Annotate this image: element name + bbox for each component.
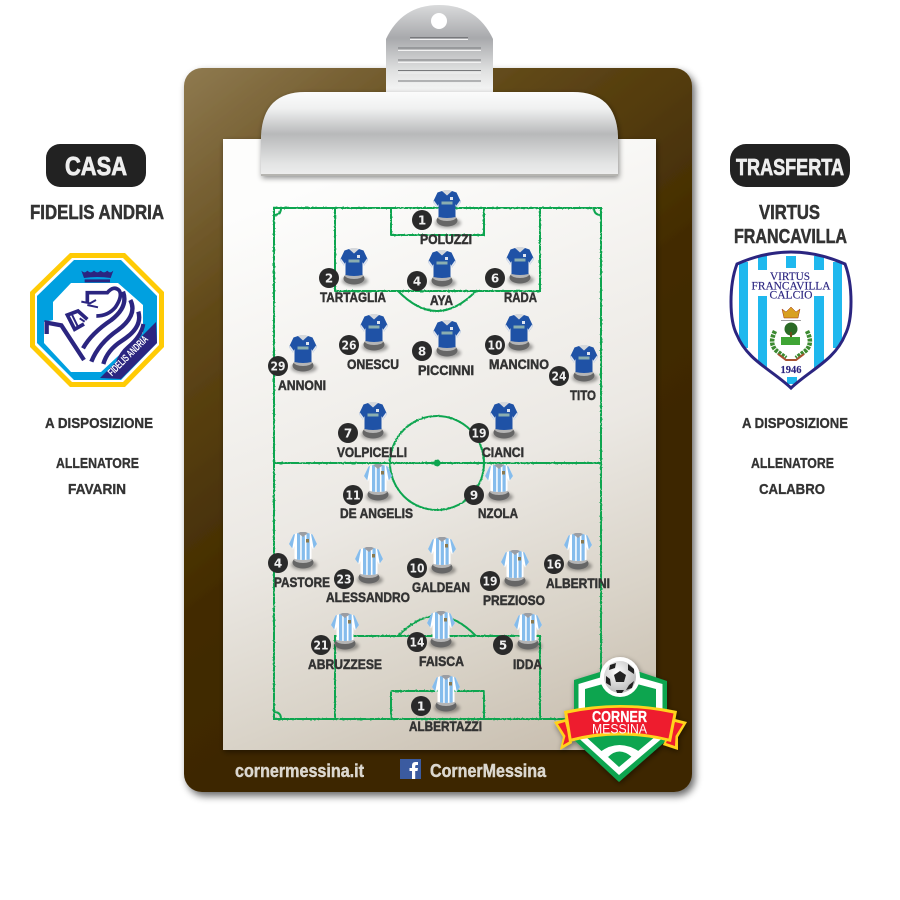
player: Abruzzese [308,612,382,672]
logo: Virtus Francavilla: FRANCAVILLA [752,278,831,292]
player: Galdean: 10 [410,562,424,576]
player: Cianci: 19 [472,426,486,440]
player: Tartaglia [319,248,386,305]
panel: away team [730,144,851,498]
player: Alessandro: 23 [336,572,352,586]
player: Abruzzese: ABRUZZESE [308,656,382,672]
player: Annoni: ANNONI [278,377,326,393]
player: Galdean: GALDEAN [412,579,470,595]
player: Albertazzi [409,674,482,734]
logo: Fidelis Andria [30,253,164,387]
player: Prezioso [480,549,545,608]
footer website: cornermessina.it [235,761,364,781]
bench label: A DISPOSIZIONE [45,415,153,432]
player: Mancino: MANCINO [489,356,549,372]
player: Idda [493,612,543,672]
badge: casa [46,144,146,187]
away team name [734,202,847,248]
metal clip tab [386,5,493,92]
coach label: ALLENATORE [56,455,139,472]
logo: Fidelis Andria: FIDELIS ANDRIA [106,333,151,379]
player: Tito: TITO [570,387,596,403]
coach name: CALABRO [759,481,825,498]
logo: Corner Messina: MESSINA [592,720,648,736]
player: Aya: AYA [430,292,453,308]
player: Volpicelli [337,402,407,460]
away team: striped players [268,463,610,734]
panel: home team [30,144,164,498]
player: Onescu: ONESCU [347,356,399,372]
player: Poluzzi: 1 [418,214,426,228]
badge: trasferta: TRASFERTA [736,154,844,180]
player: Alessandro [326,546,410,605]
player: Idda: IDDA [513,656,542,672]
home team name: FIDELIS ANDRIA [30,202,164,224]
player: Albertini: ALBERTINI [546,575,610,591]
player: Nzola [464,463,518,521]
logo: Virtus Francavilla [731,252,851,388]
player: Rada: 6 [491,272,499,286]
lion emblem [47,271,143,364]
logo: Virtus Francavilla: VIRTUS [770,269,810,283]
player: Faisca: FAISCA [419,653,464,669]
player: Idda: 5 [499,638,507,652]
player: Poluzzi: POLUZZI [420,231,472,247]
player: Cianci [469,402,524,460]
player: Poluzzi [412,190,472,247]
logo: Corner Messina: CORNER [592,709,647,726]
coach label: ALLENATORE [751,455,834,472]
player: Onescu [339,314,399,372]
player: Annoni [268,335,326,393]
paper sheet [223,139,656,750]
player: Aya [407,250,456,308]
player: Nzola: NZOLA [478,505,518,521]
player: Tito: 24 [552,370,566,384]
clipboard board [184,68,692,792]
player: Tito [549,345,598,403]
logo: Virtus Francavilla: 1946 [780,364,802,376]
player: Albertazzi: ALBERTAZZI [409,718,482,734]
player: Albertazzi: 1 [417,700,425,714]
badge: casa: CASA [65,151,127,181]
player: De Angelis: 11 [346,488,360,502]
coach name: FAVARIN [68,481,126,498]
player: Tartaglia: 2 [325,272,333,286]
player: Rada [485,247,537,305]
player: Rada: RADA [504,289,537,305]
metal clip body [261,92,618,176]
player: Mancino [485,314,549,372]
player: Onescu: 26 [342,338,356,352]
player: Faisca [407,610,464,669]
player: Galdean [407,536,470,595]
player: Albertini: 16 [546,558,562,572]
player: De Angelis [340,463,413,521]
player: Mancino: 10 [488,338,502,352]
player: Faisca: 14 [410,636,424,650]
away team name: FRANCAVILLA [734,226,847,248]
badge: trasferta [730,144,850,187]
player: Annoni: 29 [270,360,286,374]
player: Piccinni [412,320,474,378]
player: Prezioso: PREZIOSO [483,592,545,608]
player: De Angelis: DE ANGELIS [340,505,413,521]
icon: facebook [400,759,421,779]
player: Volpicelli: 7 [344,426,352,440]
player: Pastore [268,531,330,590]
player: Abruzzese: 21 [314,638,328,652]
player: Nzola: 9 [470,488,478,502]
player: Alessandro: ALESSANDRO [326,589,410,605]
football pitch [274,208,601,719]
player: Volpicelli: VOLPICELLI [337,444,407,460]
home team: blue players [268,190,598,460]
bench label: A DISPOSIZIONE [742,415,848,432]
player: Pastore: 4 [274,556,282,570]
player: Cianci: CIANCI [482,444,524,460]
player: Piccinni: 8 [418,344,426,358]
logo: Virtus Francavilla: CALCIO [770,288,813,302]
player: Pastore: PASTORE [274,574,330,590]
player: Piccinni: PICCINNI [418,362,474,378]
player: Aya: 4 [413,274,421,288]
footer facebook name: CornerMessina [430,761,547,781]
away team name: VIRTUS [759,202,820,224]
player: Tartaglia: TARTAGLIA [320,289,386,305]
player: Prezioso: 19 [482,574,498,588]
player: Albertini [544,532,610,591]
logo: Corner Messina [554,657,687,782]
